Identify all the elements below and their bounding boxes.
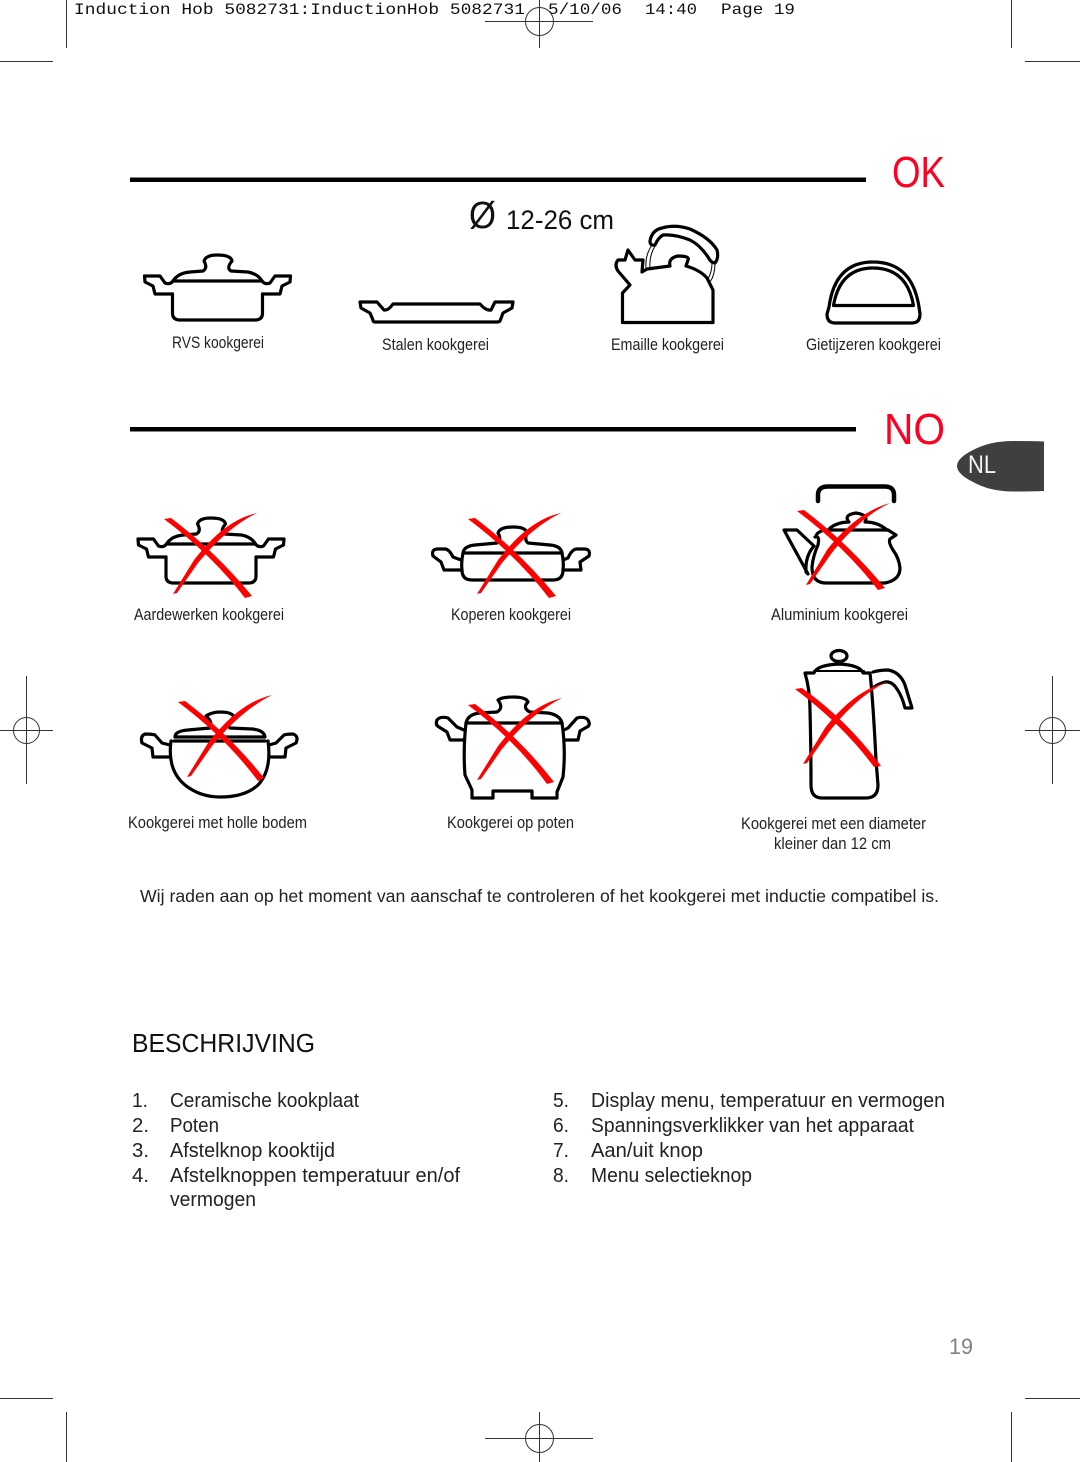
list: parts 1-4: 3. [132,1140,149,1162]
list: parts 1-4 [132,1090,460,1211]
label: Aardewerken kookgerei [134,605,284,624]
heading: NO: NO [884,405,945,454]
list: parts 5-8: Aan/uit knop [591,1140,703,1162]
heading: Beschrijving: BESCHRIJVING [132,1028,315,1058]
icon detail: kettle handle wires [646,245,715,282]
list: parts 1-4: Afstelknop kooktijd [170,1140,335,1162]
list: parts 1-4: vermogen [170,1189,256,1211]
list: parts 1-4: 1. [132,1090,148,1112]
item: aluminium cookware (not suitable) [771,486,908,624]
label: Koperen kookgerei [451,605,571,624]
label [741,814,926,853]
list: parts 5-8: 8. [553,1165,569,1187]
label: Gietijzeren kookgerei [806,335,941,354]
item: cookware with hollow base (not suitable) [128,695,307,832]
label: Kookgerei met holle bodem [128,813,307,832]
list: parts 5-8: Menu selectieknop [591,1165,752,1187]
red cross [468,698,562,784]
item: cookware on legs (not suitable) [436,697,589,832]
red cross [178,695,272,781]
list: parts 1-4: Poten [170,1115,219,1137]
diameter range [469,195,614,237]
list: parts 5-8 [553,1090,945,1187]
section rule: NO [130,427,856,432]
list: parts 5-8: Display menu, temperatuur en vermogen [591,1090,945,1112]
label: Kookgerei met een diameter [741,814,926,833]
print slug header [74,1,795,19]
label: RVS kookgerei [172,333,264,352]
list: parts 1-4: 4. [132,1165,149,1187]
section rule: OK [130,178,866,182]
list: parts 5-8: Spanningsverklikker van het apparaat [591,1115,914,1137]
icon: small coffee pot [805,650,912,798]
icon: pot on legs [436,697,589,798]
red cross [797,503,890,590]
icon: stainless pot [144,255,290,320]
list: parts 1-4: Afstelknoppen temperatuur en/of [170,1165,460,1187]
item: earthenware cookware (not suitable) [134,513,284,624]
red cross [164,513,257,598]
item: cookware under 12 cm diameter (not suitable) [741,650,926,853]
print slug header: 5/10/06 [548,1,622,19]
diameter range: 12-26 cm [506,205,614,235]
language tab: NL: NL [968,451,996,479]
item: cast iron cookware [806,262,941,354]
list: parts 5-8: 5. [553,1090,569,1112]
item: copper cookware (not suitable) [433,513,589,624]
list: parts 5-8: 7. [553,1140,569,1162]
print slug header: Induction Hob 5082731:InductionHob 5082731 [74,1,525,19]
icon: aluminium kettle [784,486,900,583]
label: kleiner dan 12 cm [774,834,891,853]
list: parts 5-8: 6. [553,1115,569,1137]
icon: earthenware pot [138,518,284,583]
label: Emaille kookgerei [611,335,724,354]
page number: 19 [949,1334,973,1359]
print slug header: Page 19 [721,1,795,19]
diameter range: Ø [469,195,496,237]
icon: enamel kettle [616,226,718,322]
item: enamel cookware [611,226,724,354]
label: Kookgerei op poten [447,813,574,832]
label: Stalen kookgerei [382,335,489,354]
red cross [468,513,561,598]
list: parts 1-4: Ceramische kookplaat [170,1090,359,1112]
icon: steel tray [360,302,513,322]
heading: OK: OK [892,148,945,197]
item: steel cookware [360,302,513,354]
icon: hollow base pot [141,712,297,797]
recommendation note: Wij raden aan op het moment van aanschaf te controleren of het kookgerei met inductie compatibel is. [140,886,939,906]
item: stainless steel cookware [144,255,290,352]
label: Aluminium kookgerei [771,605,908,624]
print slug header: 14:40 [645,1,697,19]
icon: cast iron pot [827,262,920,323]
icon: copper pan [433,527,589,580]
language tab: NL [957,441,1044,492]
list: parts 1-4: 2. [132,1115,149,1137]
red cross [795,682,887,767]
